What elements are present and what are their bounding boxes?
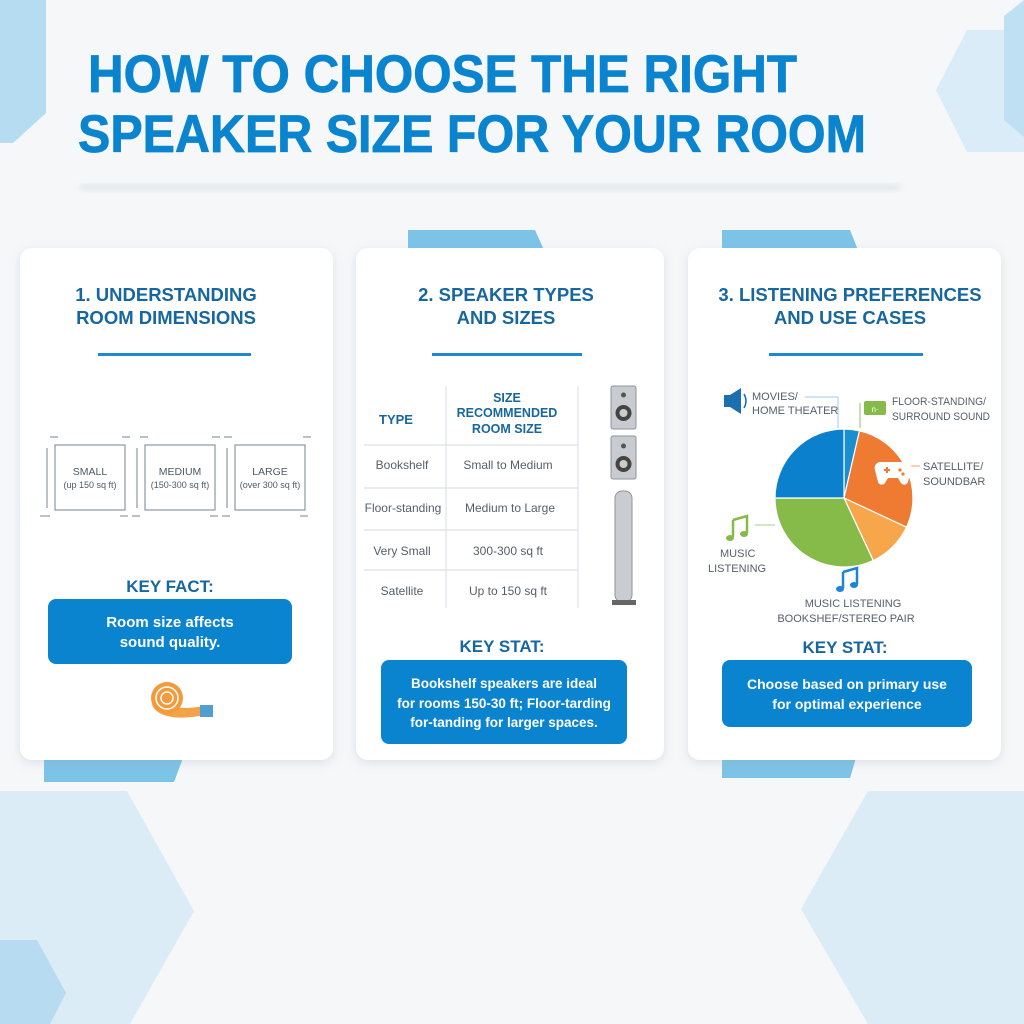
panel: room dimensions: (up 150 sq ft) — [63, 480, 117, 490]
table: SIZE — [493, 391, 521, 405]
key fact box — [48, 599, 292, 664]
key stat box: for rooms 150-30 ft; Floor-tarding — [397, 696, 611, 711]
key stat box: for-tanding for larger spaces. — [410, 715, 598, 730]
icon: game controller — [875, 462, 911, 485]
pie labels: MOVIES/ — [752, 391, 799, 403]
pie labels: SOUNDBAR — [923, 476, 985, 488]
heading 1: 1. UNDERSTANDING — [75, 284, 257, 305]
table: TYPE — [379, 412, 413, 427]
panel: room dimensions — [20, 248, 333, 760]
decorative tabs — [44, 230, 858, 782]
table: Up to 150 sq ft — [469, 584, 548, 598]
pie labels: BOOKSHEF/STEREO PAIR — [777, 613, 915, 625]
pie labels — [708, 391, 990, 625]
icon: green device — [864, 401, 886, 415]
key fact box: sound quality. — [120, 634, 220, 651]
pie labels: MUSIC LISTENING — [805, 598, 901, 610]
title: SPEAKER SIZE FOR YOUR ROOM — [78, 105, 866, 164]
pie labels: MUSIC — [720, 548, 756, 560]
heading 2 — [418, 284, 594, 328]
icon: green device: n· — [871, 405, 879, 414]
table: ROOM SIZE — [472, 422, 542, 436]
panel: room dimensions: (over 300 sq ft) — [240, 480, 300, 490]
pie labels: HOME THEATER — [752, 405, 838, 417]
icon: blue music note — [836, 568, 858, 592]
key stat box: Bookshelf speakers are ideal — [411, 676, 597, 691]
key fact box: Room size affects — [106, 614, 234, 631]
icon: green music note — [726, 516, 748, 541]
table: Floor-standing — [365, 501, 441, 515]
table: 300-300 sq ft — [473, 544, 544, 558]
panel: room dimensions: (150-300 sq ft) — [151, 480, 209, 490]
key stat label 3: KEY STAT: — [802, 638, 888, 657]
key stat label: KEY STAT: — [459, 637, 545, 656]
room size diagrams — [40, 437, 311, 516]
icon: speakers — [611, 386, 636, 605]
pie labels: LISTENING — [708, 563, 766, 575]
heading 3: AND USE CASES — [774, 307, 926, 328]
table: Medium to Large — [465, 501, 555, 515]
heading 2: 2. SPEAKER TYPES — [418, 284, 594, 305]
pie labels: SATELLITE/ — [923, 461, 984, 473]
pie labels: SURROUND SOUND — [892, 411, 990, 423]
icon: tape measure — [151, 682, 213, 718]
key stat box 3: Choose based on primary use — [747, 676, 947, 692]
heading 1 — [75, 284, 257, 328]
table: RECOMMENDED — [457, 406, 557, 420]
title: HOW TO CHOOSE THE RIGHT — [88, 45, 797, 104]
title — [78, 45, 866, 164]
heading 3: 3. LISTENING PREFERENCES — [718, 284, 982, 305]
heading 1: ROOM DIMENSIONS — [76, 307, 256, 328]
heading 3 — [718, 284, 982, 328]
key stat box 3 — [722, 660, 972, 727]
pie chart — [775, 429, 913, 567]
table: Very Small — [373, 544, 431, 558]
panel: room dimensions: LARGE — [252, 466, 288, 478]
heading 2: AND SIZES — [457, 307, 555, 328]
header shadow band — [80, 185, 900, 190]
panel: room dimensions: MEDIUM — [159, 466, 201, 478]
panel: listening preferences — [688, 248, 1001, 760]
key fact label: KEY FACT: — [126, 577, 214, 596]
key stat box 3: for optimal experience — [772, 696, 922, 712]
icon: speaker — [724, 388, 746, 414]
key stat box — [381, 660, 627, 744]
table: Satellite — [381, 584, 424, 598]
table: Small to Medium — [463, 458, 553, 472]
table — [364, 386, 578, 608]
table: Bookshelf — [376, 458, 429, 472]
pie labels: FLOOR-STANDING/ — [892, 396, 987, 408]
panel: room dimensions: SMALL — [73, 466, 107, 478]
panel: speaker types — [356, 248, 664, 760]
